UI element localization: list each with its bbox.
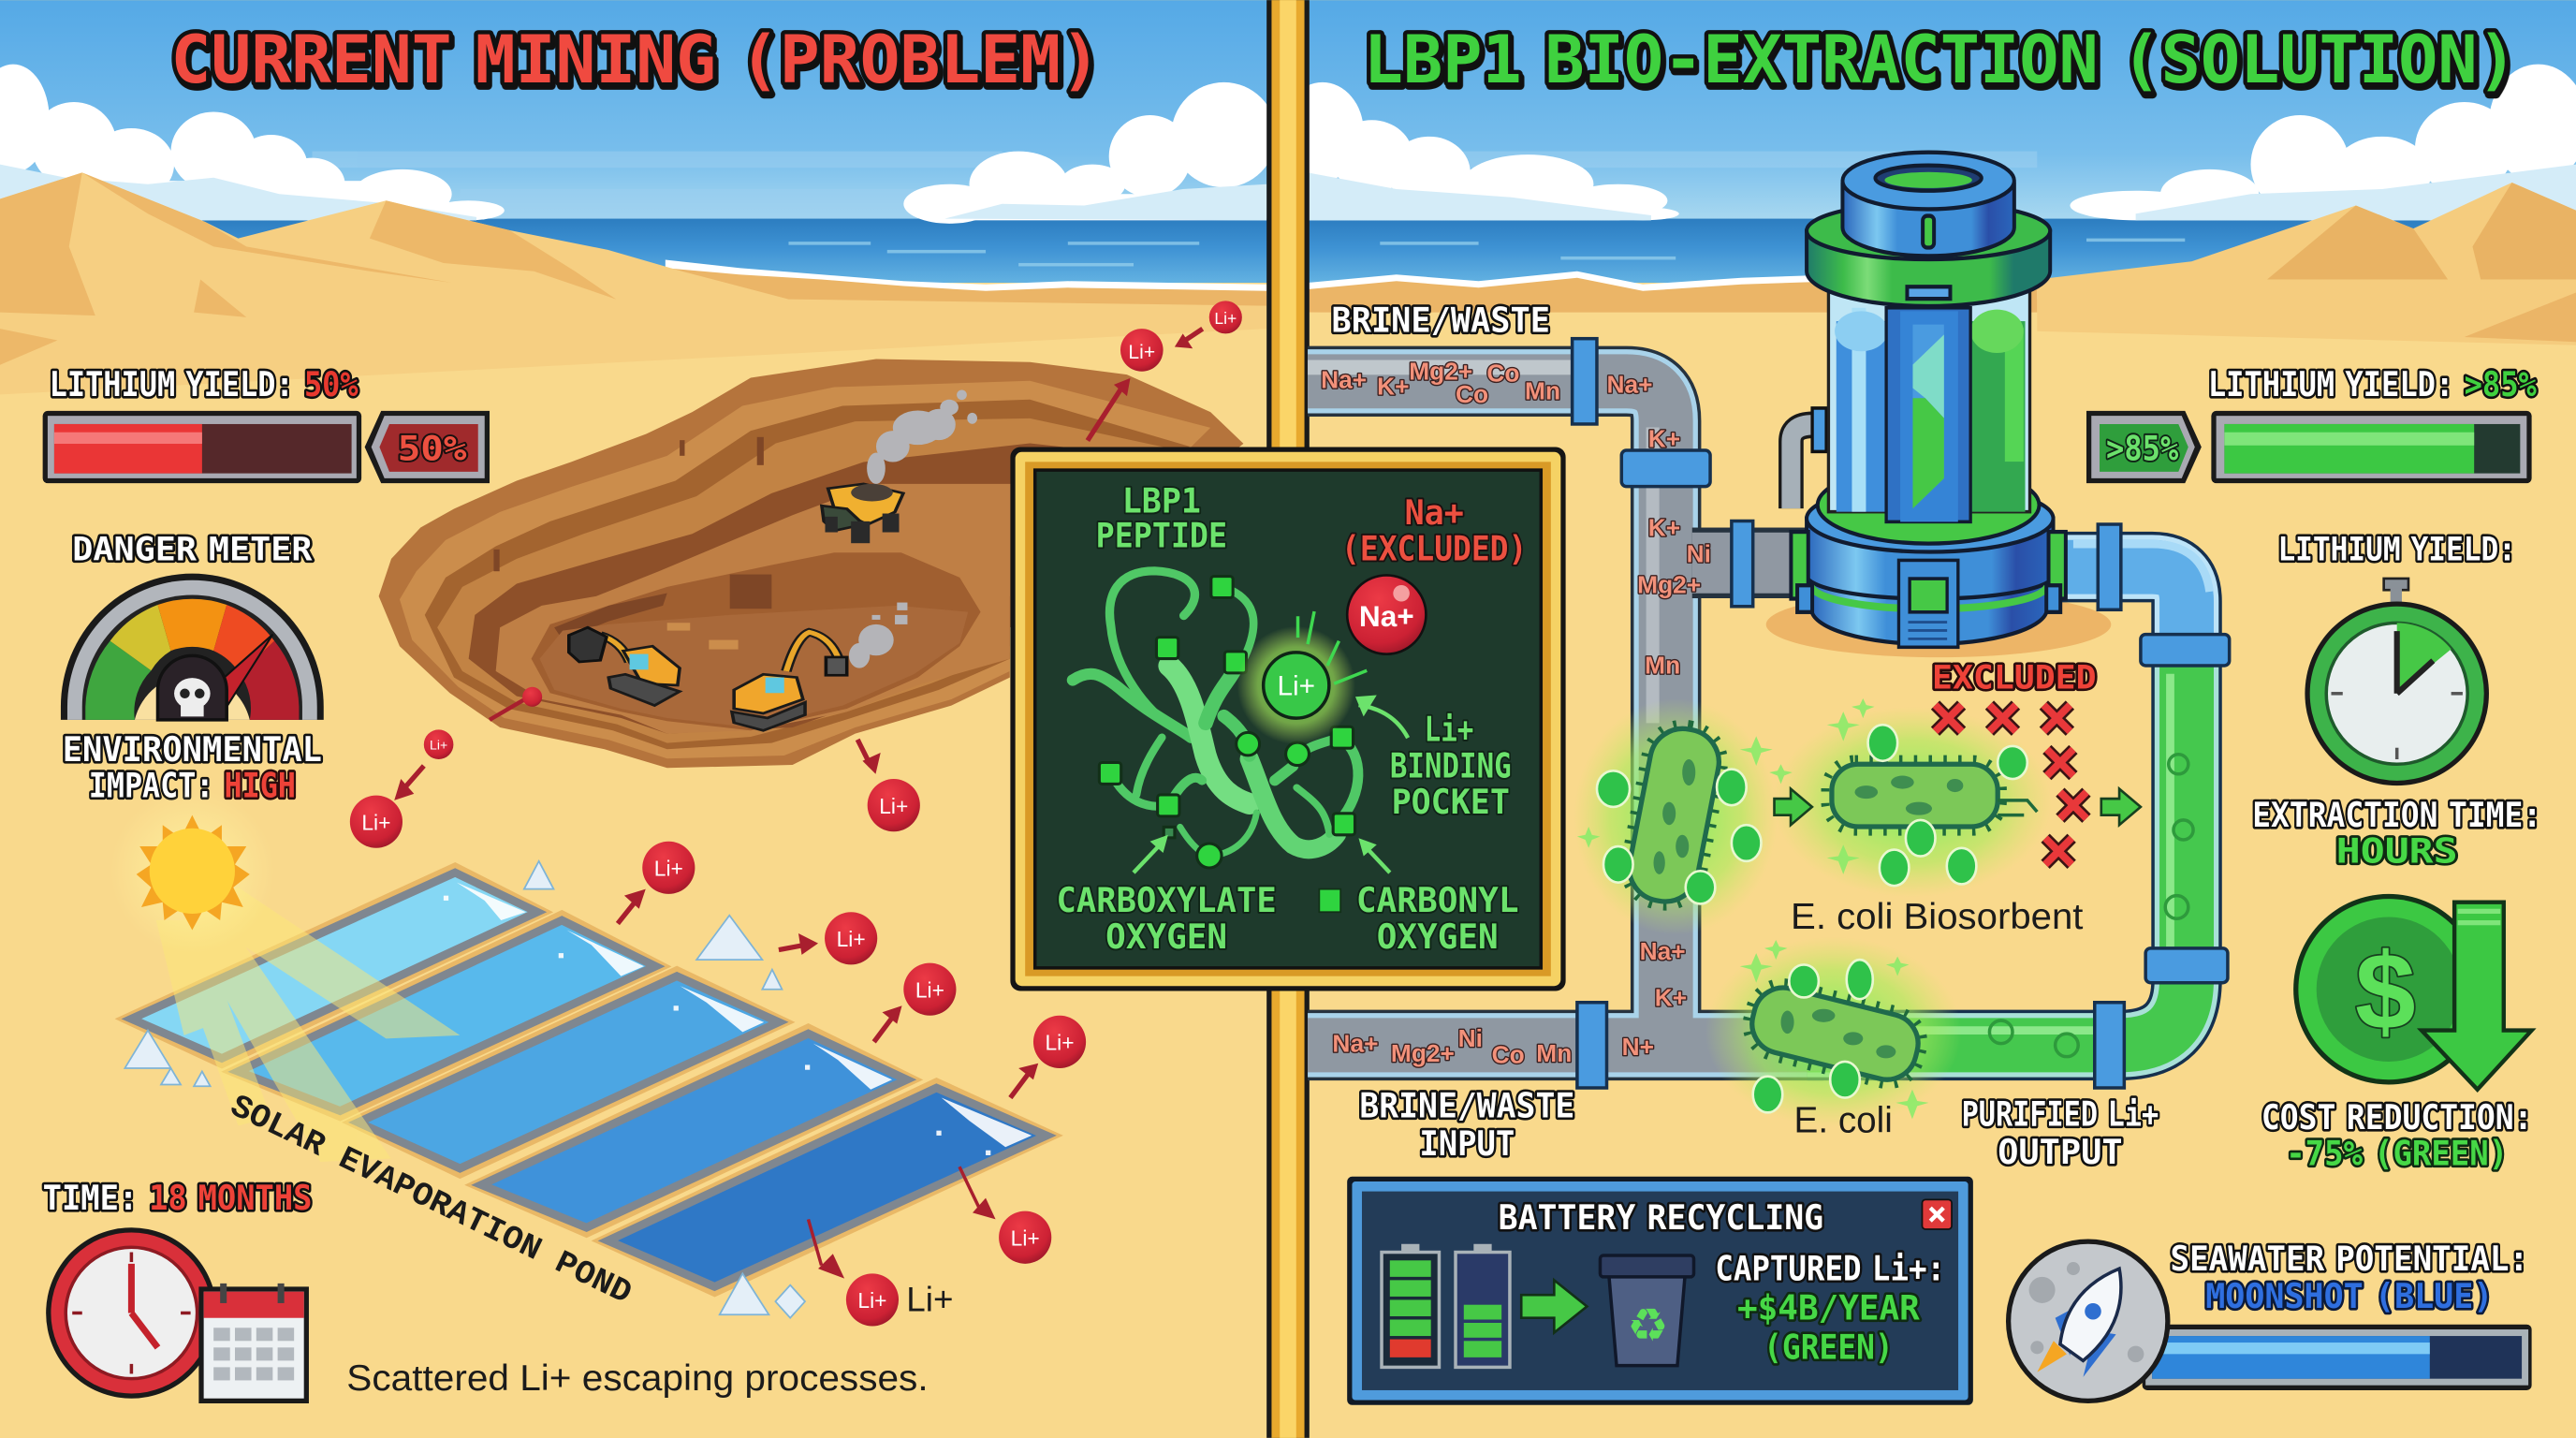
cost reduction label: COST REDUCTION: [2261,1097,2532,1137]
pipe ions: Na+ [1321,365,1367,393]
full battery [1382,1244,1439,1367]
salt piles [124,861,805,1318]
captured Li+ text [1715,1248,1945,1368]
Li+ bound ion: Li+ [1277,671,1315,702]
dump truck [822,484,903,543]
pipe ions: Na+ [1607,371,1653,399]
title: current mining: CURRENT MINING (PROBLEM) [171,22,1101,98]
pipe ions: Ni [1458,1024,1483,1052]
partial battery [1456,1244,1510,1367]
title: bio-extraction: LBP1 BIO-EXTRACTION (SOLUTION) [1364,22,2517,98]
seawater potential label: SEAWATER POTENTIAL: [2170,1239,2528,1279]
peptide panel labels: OXYGEN [1377,917,1499,957]
pointer arrows [1134,696,1408,873]
pipe ions: K+ [1648,425,1680,453]
scattered Li+ balls and arrows: Li+ [430,737,447,752]
peptide panel labels: Na+ [1405,492,1464,533]
peptide panel labels: PEPTIDE [1096,516,1227,556]
purified output label: OUTPUT [1998,1132,2123,1172]
solar evaporation pond label: SOLAR EVAPORATION POND [225,1088,637,1313]
pipe ions: N+ [1622,1033,1654,1061]
Na+ excluded ion [1347,575,1426,654]
environmental impact label: ENVIRONMENTAL [63,729,322,770]
recycling bin: ♻ [1627,1298,1668,1352]
extraction time label [2252,795,2541,872]
pipe ions: Na+ [1332,1029,1378,1057]
peptide panel labels [1057,481,1527,957]
side feed pipe [1791,408,1826,508]
e. coli lower [1705,937,1962,1127]
scattered Li+ balls and arrows [350,301,1242,1327]
purified output label: PURIFIED Li+ [1962,1093,2159,1134]
sparkles [1577,698,1928,1119]
pipe ions: K+ [1648,513,1680,541]
right yield bar [2086,411,2532,483]
seawater potential label: MOONSHOT (BLUE) [2205,1276,2493,1316]
Na+ excluded ion: Na+ [1359,599,1414,633]
brine/waste label: BRINE/WASTE [1332,301,1550,341]
peptide panel labels: BINDING [1390,745,1512,785]
glass vessel [1828,291,2030,521]
pipe ions [1321,358,1711,1069]
scattered Li+ balls and arrows: Li+ [1214,309,1237,328]
second lithium yield label: LITHIUM YIELD: [2277,531,2516,569]
moon with rocket [2006,1239,2170,1403]
seawater potential label [2170,1239,2528,1316]
e. coli vertical [1573,698,1778,935]
peptide panel labels: CARBONYL [1356,880,1519,920]
time label: TIME: 18 MONTHS [43,1178,312,1218]
excluded X marks [1936,705,2086,864]
brine input label: INPUT [1419,1123,1515,1164]
panel: battery recycling [1347,1177,1973,1405]
peptide ribbon [1073,571,1358,856]
dunes and shoreline [0,172,2576,657]
left yield bar [43,411,490,483]
right yield bar: >85% [2106,429,2178,469]
cost coin icon with down arrow: $ [2355,931,2416,1052]
peptide panel labels: CARBOXYLATE [1057,880,1277,920]
scattered Li+ balls and arrows: Li+ [879,794,908,818]
e. coli horizontal [1773,707,2052,897]
pipe ions: Co [1492,1041,1525,1069]
Li+ bound ion [1237,611,1367,744]
environmental impact label: IMPACT: HIGH [89,765,296,805]
danger gauge [61,574,324,720]
e. coli biosorbent label: E. coli Biosorbent [1791,897,2084,937]
excavator two [732,632,847,730]
sun rays [156,888,460,1162]
pipe ions: Mn [1536,1039,1572,1067]
scattered Li+ balls and arrows: Li+ [1046,1031,1075,1055]
open pit mine [379,359,1243,768]
pipe ions: Co [1456,380,1488,408]
calendar icon [198,1284,309,1403]
captured Li+ text: (GREEN) [1764,1328,1894,1368]
scattered Li+ balls and arrows: Li+ [654,857,683,881]
peptide panel labels: (EXCLUDED) [1341,529,1527,569]
scattered Li+ balls and arrows: Li+ [361,810,390,834]
panel: LBP1 peptide [1010,448,1566,990]
recycling bin [1600,1255,1694,1366]
bioreactor [1791,153,2066,647]
Li+ legend text: Li+ [906,1281,953,1319]
stopwatch icon [2305,579,2489,785]
peptide panel labels: LBP1 [1122,481,1201,521]
captured Li+ text: +$4B/YEAR [1737,1287,1921,1328]
excavator one [569,627,680,706]
danger meter label: DANGER METER [72,531,313,569]
e. coli label: E. coli [1794,1100,1893,1140]
cost reduction label [2261,1097,2532,1174]
pipe ions: Mg2+ [1637,571,1701,599]
smoke plumes [849,389,977,668]
scattered Li+ balls and arrows: Li+ [857,1288,886,1313]
purified output label [1962,1093,2159,1172]
pipe ions: K+ [1655,983,1687,1011]
peptide panel labels: POCKET [1392,782,1510,822]
scattered Li+ balls and arrows: Li+ [1011,1226,1040,1251]
pipe ions: Mn [1645,652,1680,680]
scattered Li+ balls and arrows: Li+ [837,927,866,951]
evaporation ponds [126,868,1051,1292]
seawater progress bar [2143,1325,2532,1390]
peptide panel labels: Li+ [1425,710,1473,750]
oxygen nodes [1099,577,1355,868]
clock icon [46,1227,217,1399]
environmental impact label [63,729,322,805]
scattered caption: Scattered Li+ escaping processes. [346,1358,929,1399]
green arrow [1521,1280,1587,1333]
pipe ions: Mg2+ [1391,1039,1455,1067]
close button [1922,1199,1952,1229]
brine input label: BRINE/WASTE [1359,1086,1574,1126]
pipe ions: Co [1486,359,1519,387]
extraction time label: HOURS [2336,831,2458,872]
collar and cap [1807,153,2050,306]
pipe ions: K+ [1377,372,1410,400]
captured Li+ text: CAPTURED Li+: [1715,1248,1945,1288]
left yield bar: 50% [398,429,466,469]
scattered Li+ balls and arrows: Li+ [1128,342,1155,363]
pipe ions: Mg2+ [1409,358,1472,386]
cost coin icon with down arrow [2293,894,2532,1090]
scattered Li+ balls and arrows: Li+ [915,977,944,1002]
peptide panel labels: OXYGEN [1105,917,1227,957]
pipe ions: Mn [1525,377,1560,405]
pipe ions: Ni [1687,539,1711,567]
cost reduction label: -75% (GREEN) [2286,1134,2508,1174]
control panel [1898,560,1958,647]
left lithium yield label: LITHIUM YIELD: 50% [50,364,359,404]
pipe network [1308,339,2230,1088]
extraction time label: EXTRACTION TIME: [2252,795,2541,835]
reactor lower base [1791,466,2066,644]
right lithium yield label: LITHIUM YIELD: >85% [2208,364,2537,404]
flow arrows [1775,789,2141,825]
excluded label: EXCLUDED [1932,659,2097,697]
clouds [0,65,2576,224]
brine input label [1359,1086,1574,1164]
center gold divider [1266,0,1310,1438]
pipe ions: Na+ [1640,937,1686,965]
sun [110,789,274,953]
battery title: BATTERY RECYCLING [1499,1197,1823,1238]
